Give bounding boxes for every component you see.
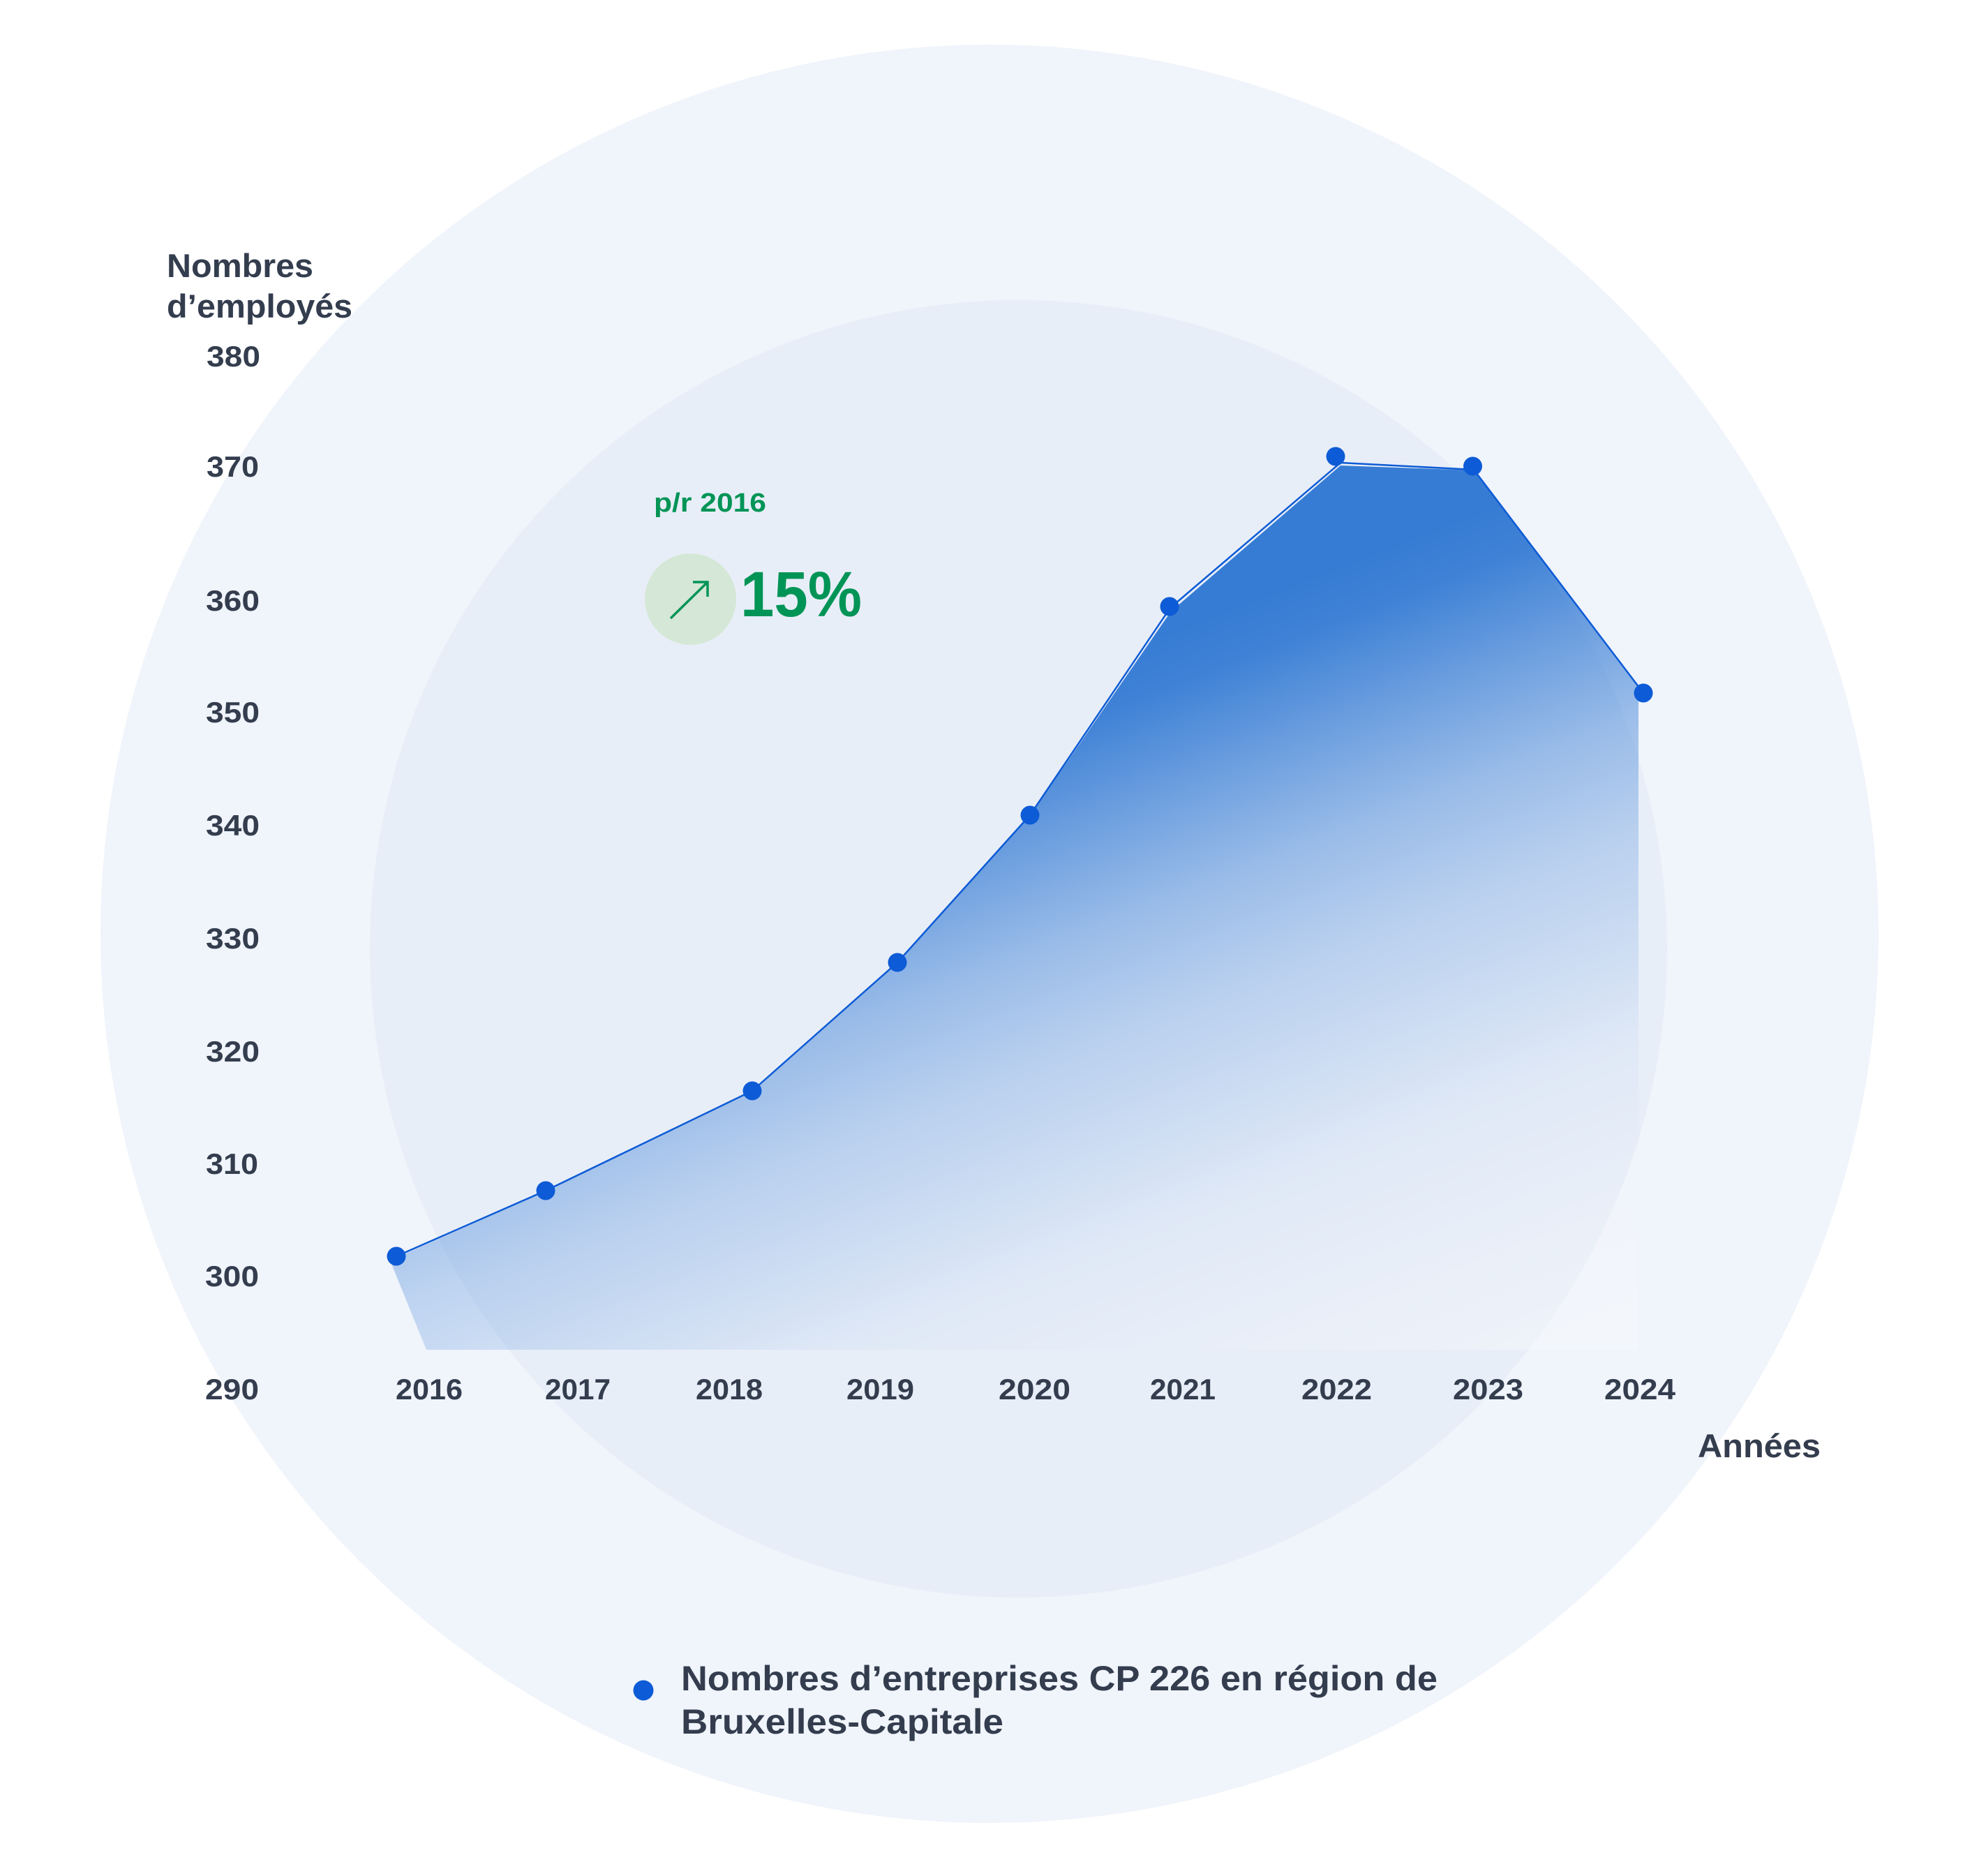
callout value: 15%	[740, 559, 862, 630]
y axis labels: 300	[205, 1260, 259, 1293]
y axis title: Nombres	[167, 247, 313, 284]
x axis title: Années	[1698, 1427, 1821, 1464]
x axis labels: 2020	[999, 1373, 1070, 1406]
legend text: Nombres d’entreprises CP 226 en région de	[681, 1659, 1438, 1698]
x axis labels: 2016	[396, 1373, 463, 1406]
y axis labels: 380	[207, 340, 260, 373]
legend marker	[634, 1681, 653, 1700]
x axis labels: 2022	[1301, 1373, 1372, 1406]
x axis labels: 2021	[1150, 1373, 1216, 1406]
x axis labels: 2018	[696, 1373, 763, 1406]
y axis labels: 310	[206, 1147, 258, 1180]
data points	[387, 447, 1652, 1266]
x axis labels: 2017	[545, 1373, 611, 1406]
background circle: inner	[370, 300, 1667, 1598]
y axis labels: 370	[207, 450, 259, 483]
legend text: Bruxelles-Capitale	[681, 1702, 1003, 1741]
legend	[634, 1659, 1438, 1741]
x axis labels	[396, 1373, 1676, 1406]
y axis labels	[205, 340, 260, 1406]
legend text	[681, 1659, 1438, 1741]
x axis labels: 2019	[846, 1373, 914, 1406]
line chart	[396, 463, 1643, 1256]
callout: growth compared to 2016	[645, 489, 862, 645]
area chart fill	[390, 466, 1638, 1350]
y axis labels: 320	[206, 1035, 260, 1068]
y axis labels: 330	[206, 922, 260, 955]
y axis labels: 360	[206, 584, 260, 617]
y axis labels: 350	[206, 696, 260, 729]
x axis labels: 2024	[1604, 1373, 1676, 1406]
y axis labels: 290	[205, 1373, 259, 1406]
y axis title	[167, 247, 352, 325]
callout label: p/r 2016	[654, 489, 766, 518]
y axis title: d’employés	[167, 288, 352, 325]
icon: rising arrow	[645, 553, 736, 645]
y axis labels: 340	[206, 809, 260, 842]
x axis labels: 2023	[1453, 1373, 1523, 1406]
